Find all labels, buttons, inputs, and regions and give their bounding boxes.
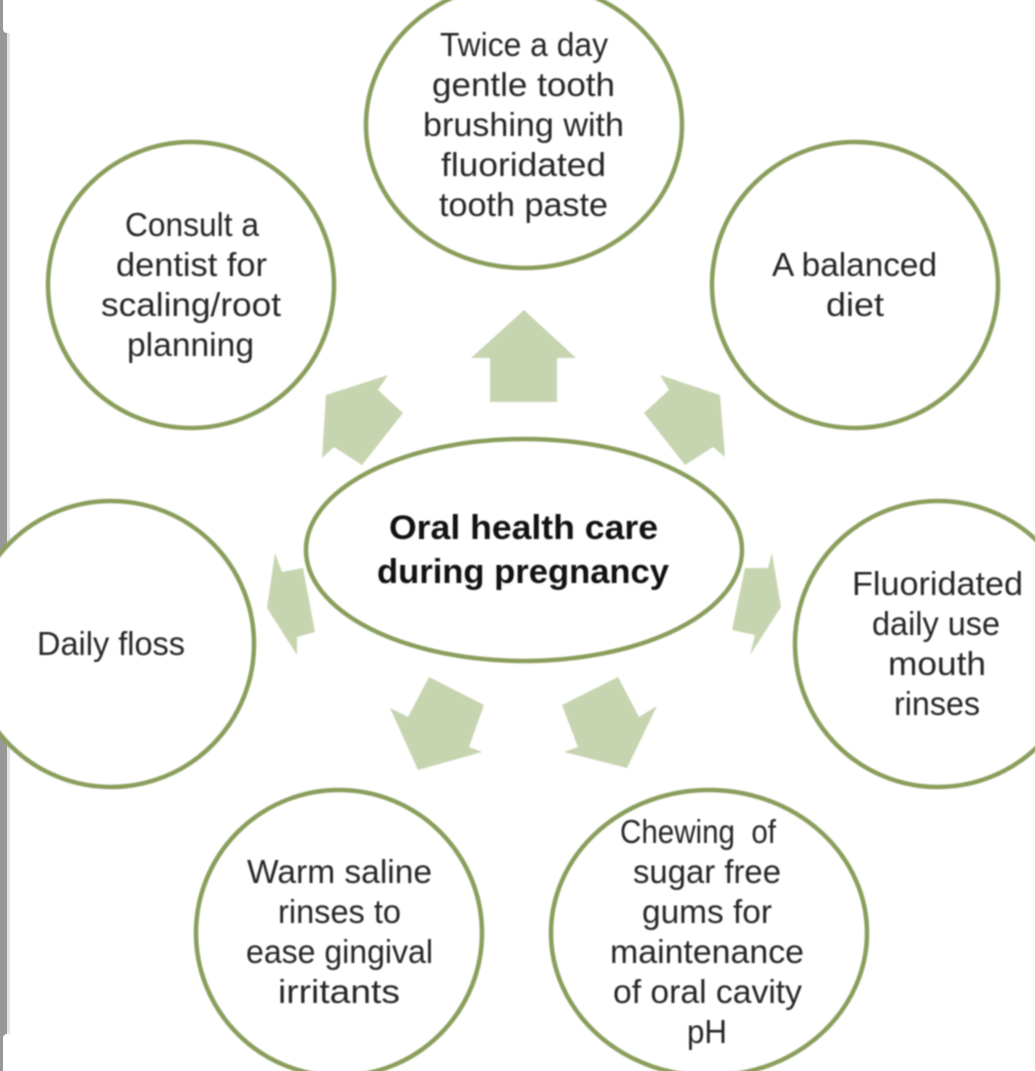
node: daily floss <box>0 501 254 787</box>
node: consult a dentist: planning <box>127 326 254 363</box>
centre node: oral health care during pregnancy: during pregnancy <box>377 553 669 591</box>
node: consult a dentist <box>48 142 334 428</box>
node: tooth brushing: fluoridated <box>441 146 606 183</box>
node: warm saline rinses: Warm saline <box>247 853 432 890</box>
node: consult a dentist: scaling/root <box>101 286 281 323</box>
node: tooth brushing: brushing with <box>423 106 624 143</box>
arrow: lower right <box>562 677 657 768</box>
node: fluoridated mouth rinses <box>795 501 1035 787</box>
node: fluoridated mouth rinses: daily use <box>872 605 1000 642</box>
node: sugar free gums: Chewing of <box>620 813 777 850</box>
node: sugar free gums: maintenance <box>610 933 804 970</box>
node: warm saline rinses: ease gingival <box>246 933 433 970</box>
node: sugar free gums: sugar free <box>633 853 781 890</box>
centre node: oral health care during pregnancy: Oral health care <box>389 509 658 547</box>
arrow: lower left <box>390 677 484 770</box>
node: sugar free gums: gums for <box>642 893 772 930</box>
node: tooth brushing <box>366 0 682 268</box>
arrow: up <box>471 310 576 402</box>
node: sugar free gums: of oral cavity <box>613 973 802 1010</box>
node: fluoridated mouth rinses: mouth <box>888 645 986 682</box>
node: balanced diet: diet <box>826 286 884 323</box>
node: sugar free gums: pH <box>687 1013 727 1050</box>
arrow: upper right <box>644 375 725 465</box>
arrow: right <box>732 553 781 655</box>
centre node: oral health care during pregnancy <box>306 439 742 661</box>
node: warm saline rinses: rinses to <box>278 893 401 930</box>
node: fluoridated mouth rinses: rinses <box>894 685 980 722</box>
window edge: left scrollbar strip <box>0 0 10 1071</box>
arrow: upper left <box>322 375 403 465</box>
node: tooth brushing: tooth paste <box>439 186 608 223</box>
node: daily floss: Daily floss <box>37 625 185 662</box>
node: balanced diet <box>712 142 998 428</box>
node: consult a dentist: dentist for <box>116 246 267 283</box>
node: fluoridated mouth rinses: Fluoridated <box>852 565 1023 602</box>
node: consult a dentist: Consult a <box>125 206 260 243</box>
arrow: left <box>267 553 315 655</box>
node: balanced diet: A balanced <box>772 246 937 283</box>
node: warm saline rinses: irritants <box>278 973 400 1010</box>
node: tooth brushing: Twice a day <box>440 26 608 63</box>
node: sugar free gums <box>551 790 867 1071</box>
node: warm saline rinses <box>196 790 482 1071</box>
node: tooth brushing: gentle tooth <box>432 66 615 103</box>
